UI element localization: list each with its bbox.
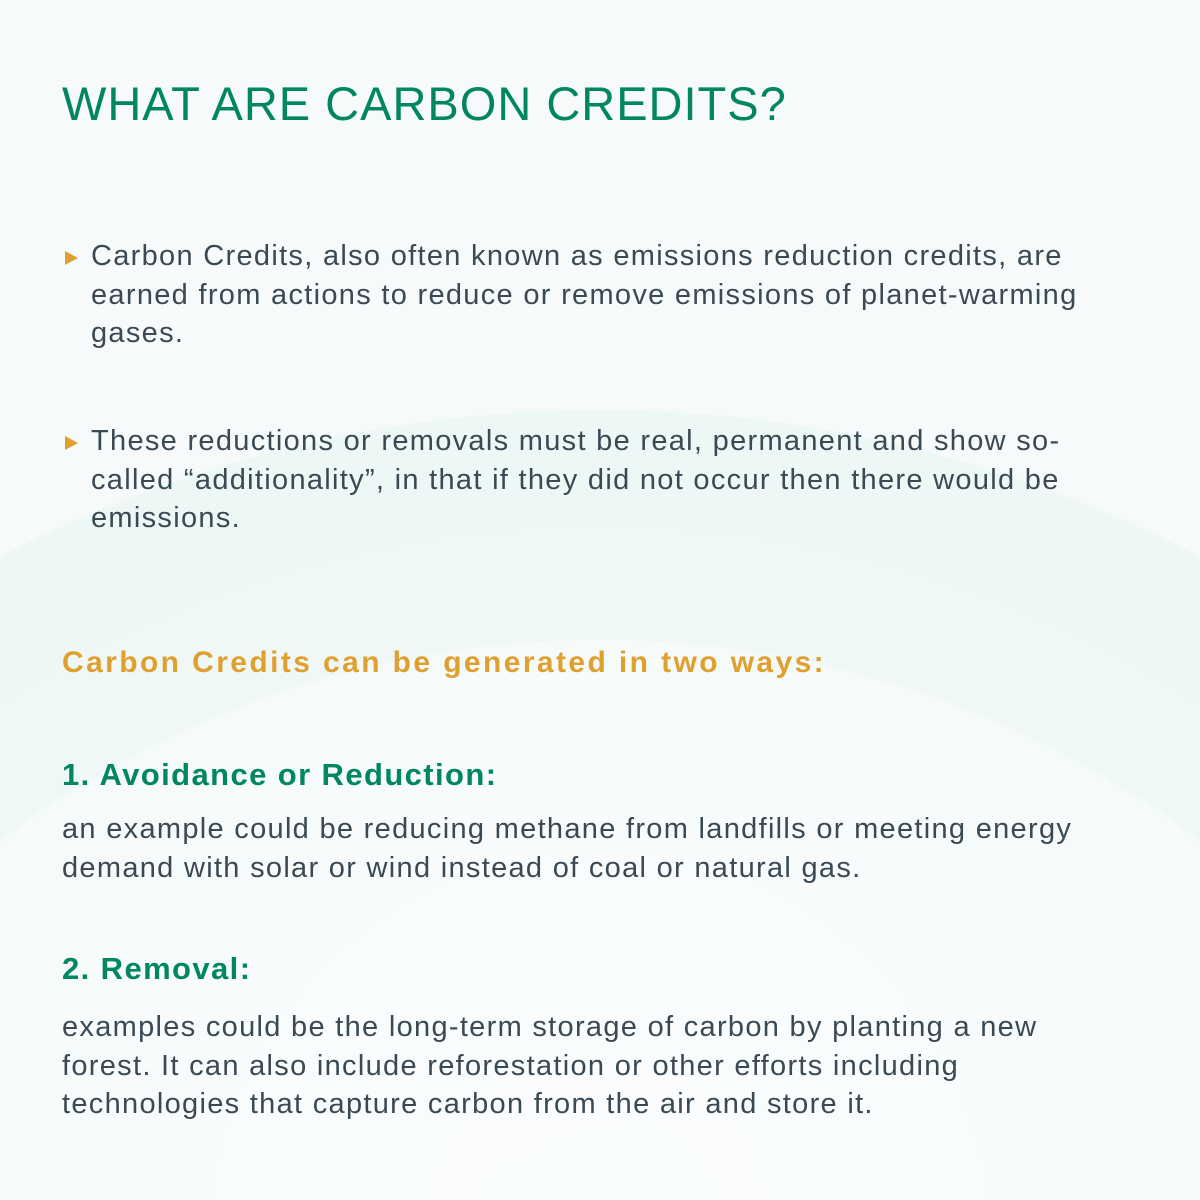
bullet 1 [65,240,1078,349]
body 1 [62,813,1072,884]
icon: triangle [65,436,78,450]
text: gases. [91,317,184,349]
body 2: technologies that capture carbon from the air and store it. [62,1088,874,1120]
text: These reductions or removals must be real, permanent and show so- [91,425,1060,457]
text: Carbon Credits, also often known as emissions reduction credits, are [91,240,1063,272]
text [91,425,1060,534]
heading 1: 1. Avoidance or Reduction: [62,757,497,792]
text: earned from actions to reduce or remove emissions of planet-warming [91,278,1078,310]
body 1: an example could be reducing methane from landfills or meeting energy [62,813,1072,845]
body 2: examples could be the long-term storage of carbon by planting a new [62,1011,1037,1043]
body 2 [62,1011,1037,1120]
bullet 2 [65,425,1060,534]
text [91,240,1078,349]
heading 2: 2. Removal: [62,951,251,986]
icon: triangle [65,251,78,265]
subheading: Carbon Credits can be generated in two ways: [62,646,826,679]
text: emissions. [91,502,241,534]
body 2: forest. It can also include reforestation or other efforts including [62,1050,959,1082]
text: called “additionality”, in that if they did not occur then there would be [91,464,1060,496]
body 1: demand with solar or wind instead of coal or natural gas. [62,852,862,884]
title: WHAT ARE CARBON CREDITS? [62,77,787,130]
